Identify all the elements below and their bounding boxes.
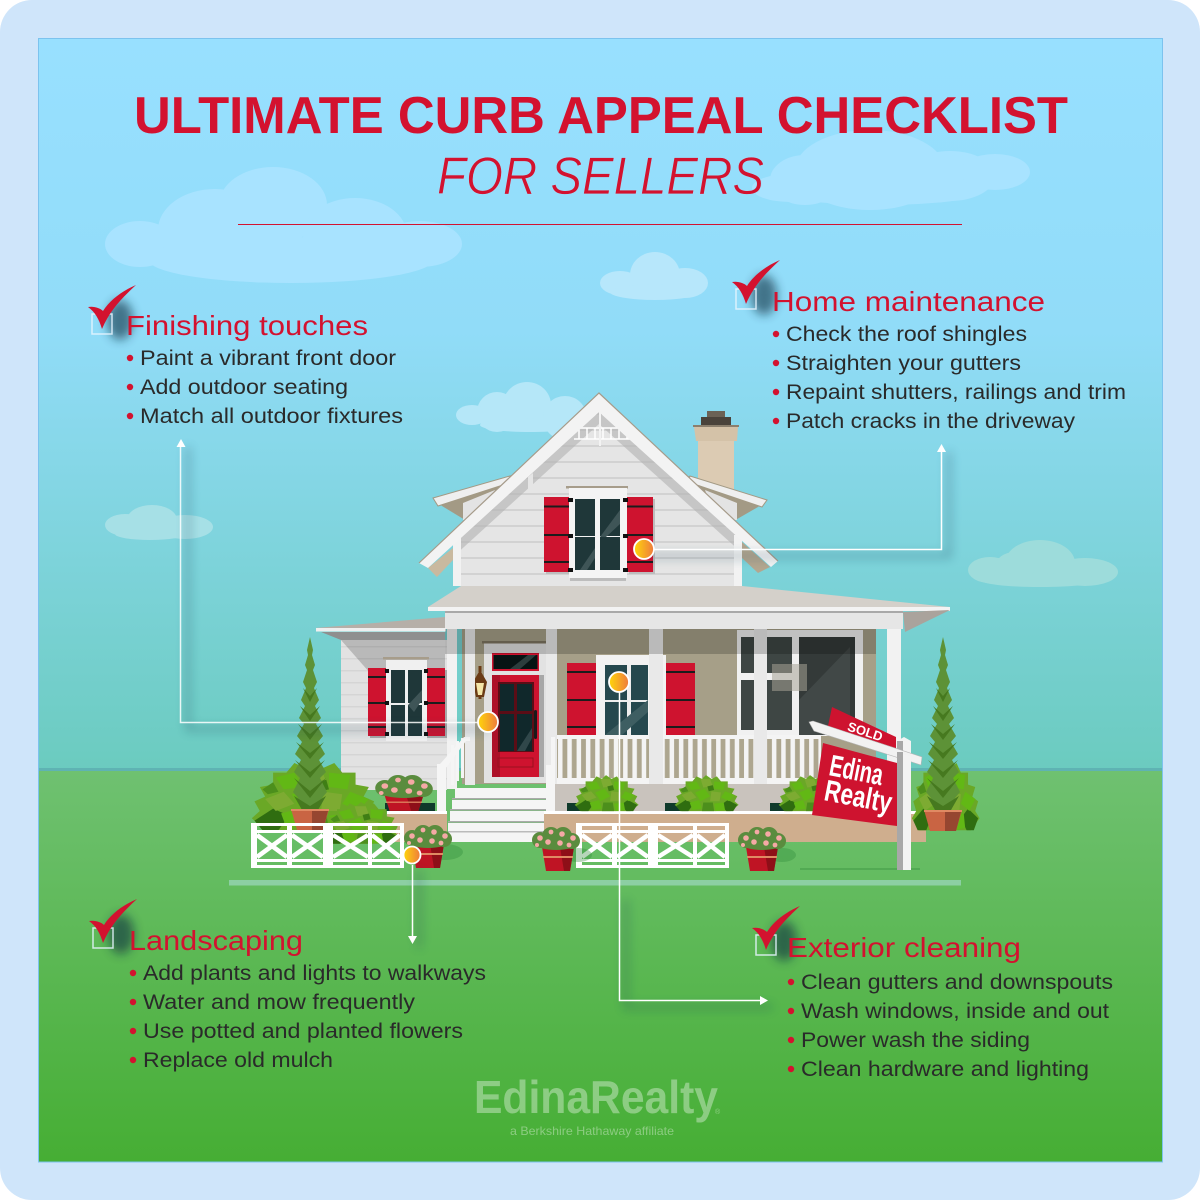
list: Use potted and planted flowers	[143, 1020, 463, 1043]
title underline	[238, 224, 962, 225]
dormer eaves	[433, 475, 767, 526]
shrubs	[575, 775, 843, 811]
gable wall	[453, 408, 742, 586]
panel: finishing touches	[88, 285, 403, 428]
sign post front	[897, 752, 911, 870]
porch window	[567, 655, 695, 735]
heading: Landscaping	[129, 925, 303, 956]
icon: check	[732, 260, 780, 315]
porch ceiling shadow	[445, 629, 876, 654]
cloud: right lower	[968, 540, 1118, 587]
sign arm	[809, 721, 922, 765]
lantern	[473, 666, 487, 699]
porch back wall	[462, 629, 876, 784]
panel: exterior cleaning	[752, 906, 1113, 1081]
horizon line	[39, 768, 1162, 771]
list: Paint a vibrant front door	[140, 347, 396, 370]
gable roof	[419, 393, 778, 577]
list: Power wash the siding	[801, 1029, 1030, 1052]
list: Straighten your gutters	[786, 352, 1021, 375]
ground	[38, 770, 1162, 1162]
heading: Exterior cleaning	[787, 932, 1021, 963]
sky	[38, 38, 1162, 770]
ground path line	[229, 880, 961, 886]
logo: ®	[715, 1108, 721, 1116]
front door	[492, 653, 544, 777]
list: Water and mow frequently	[143, 991, 416, 1014]
marker dot: plants	[404, 846, 420, 864]
porch railings	[557, 735, 821, 784]
marker dot: shutter	[634, 539, 654, 559]
icon: check	[752, 906, 800, 961]
sign panel	[812, 743, 897, 826]
flower pot: left	[404, 825, 452, 868]
house illustration	[229, 393, 980, 886]
corner boards	[453, 535, 742, 586]
sold rider: SOLD	[846, 719, 885, 744]
sold sign	[809, 707, 922, 870]
cloud: left large	[105, 167, 462, 283]
pot shadows	[427, 844, 920, 870]
list	[130, 962, 486, 1072]
left cypress tree	[291, 637, 329, 830]
left wing	[315, 617, 447, 790]
logo: EdinaRealty	[474, 1071, 718, 1123]
list: Match all outdoor fixtures	[140, 405, 403, 428]
title: ULTIMATE CURB APPEAL CHECKLIST	[134, 87, 1068, 145]
roof shadow	[453, 412, 742, 557]
sold rider	[828, 707, 896, 749]
sign panel: Realty	[822, 774, 895, 820]
planter beds	[387, 811, 926, 842]
connector: landscaping	[408, 865, 417, 944]
heading: Home maintenance	[772, 286, 1045, 317]
logo: a Berkshire Hathaway affiliate	[510, 1124, 674, 1138]
sign panel: Edina	[827, 749, 886, 792]
fence: right	[576, 823, 729, 868]
flower pot: porch	[375, 775, 433, 811]
connector: home maintenance	[654, 444, 946, 550]
list: Clean hardware and lighting	[801, 1058, 1089, 1081]
icon: check	[89, 899, 137, 954]
list	[127, 347, 403, 428]
list: Add outdoor seating	[140, 376, 348, 399]
icon: check	[88, 285, 136, 340]
marker dot: door	[478, 712, 498, 732]
heading: Finishing touches	[126, 310, 368, 341]
cloud: top right	[752, 130, 1030, 210]
list: Add plants and lights to walkways	[143, 962, 486, 985]
flower pot: center	[532, 827, 580, 871]
list: Repaint shutters, railings and trim	[786, 381, 1126, 404]
porch columns	[447, 629, 901, 789]
list: Patch cracks in the driveway	[786, 410, 1076, 433]
chimney	[693, 411, 739, 501]
connector shadows	[188, 447, 949, 1007]
right cypress tree	[924, 637, 962, 831]
sign post	[897, 737, 911, 870]
stairs	[448, 788, 554, 842]
stair railing	[437, 737, 555, 813]
connector: finishing touches	[176, 439, 478, 722]
cloud: small upper	[600, 252, 708, 300]
cloud: behind house	[456, 382, 587, 440]
flower pot: right	[738, 827, 786, 871]
panel: landscaping	[89, 899, 486, 1072]
attic vent	[574, 410, 630, 446]
left large bush	[252, 761, 377, 830]
left lower bush	[324, 802, 399, 844]
list	[773, 323, 1126, 433]
list: Clean gutters and downspouts	[801, 971, 1113, 994]
upper shutters and window	[544, 486, 655, 581]
subtitle: FOR SELLERS	[437, 147, 764, 206]
connector: exterior cleaning	[620, 692, 768, 1005]
list	[788, 971, 1113, 1081]
panel: home maintenance	[732, 260, 1126, 433]
list: Wash windows, inside and out	[801, 1000, 1109, 1023]
large porch window	[737, 630, 863, 736]
marker dot: window	[609, 672, 629, 692]
right large bush	[912, 761, 980, 830]
foundation	[385, 784, 875, 811]
cloud: left small	[105, 505, 213, 540]
main porch roof	[428, 586, 950, 632]
fence: left	[251, 823, 404, 868]
list: Check the roof shingles	[786, 323, 1027, 346]
list: Replace old mulch	[143, 1049, 333, 1072]
